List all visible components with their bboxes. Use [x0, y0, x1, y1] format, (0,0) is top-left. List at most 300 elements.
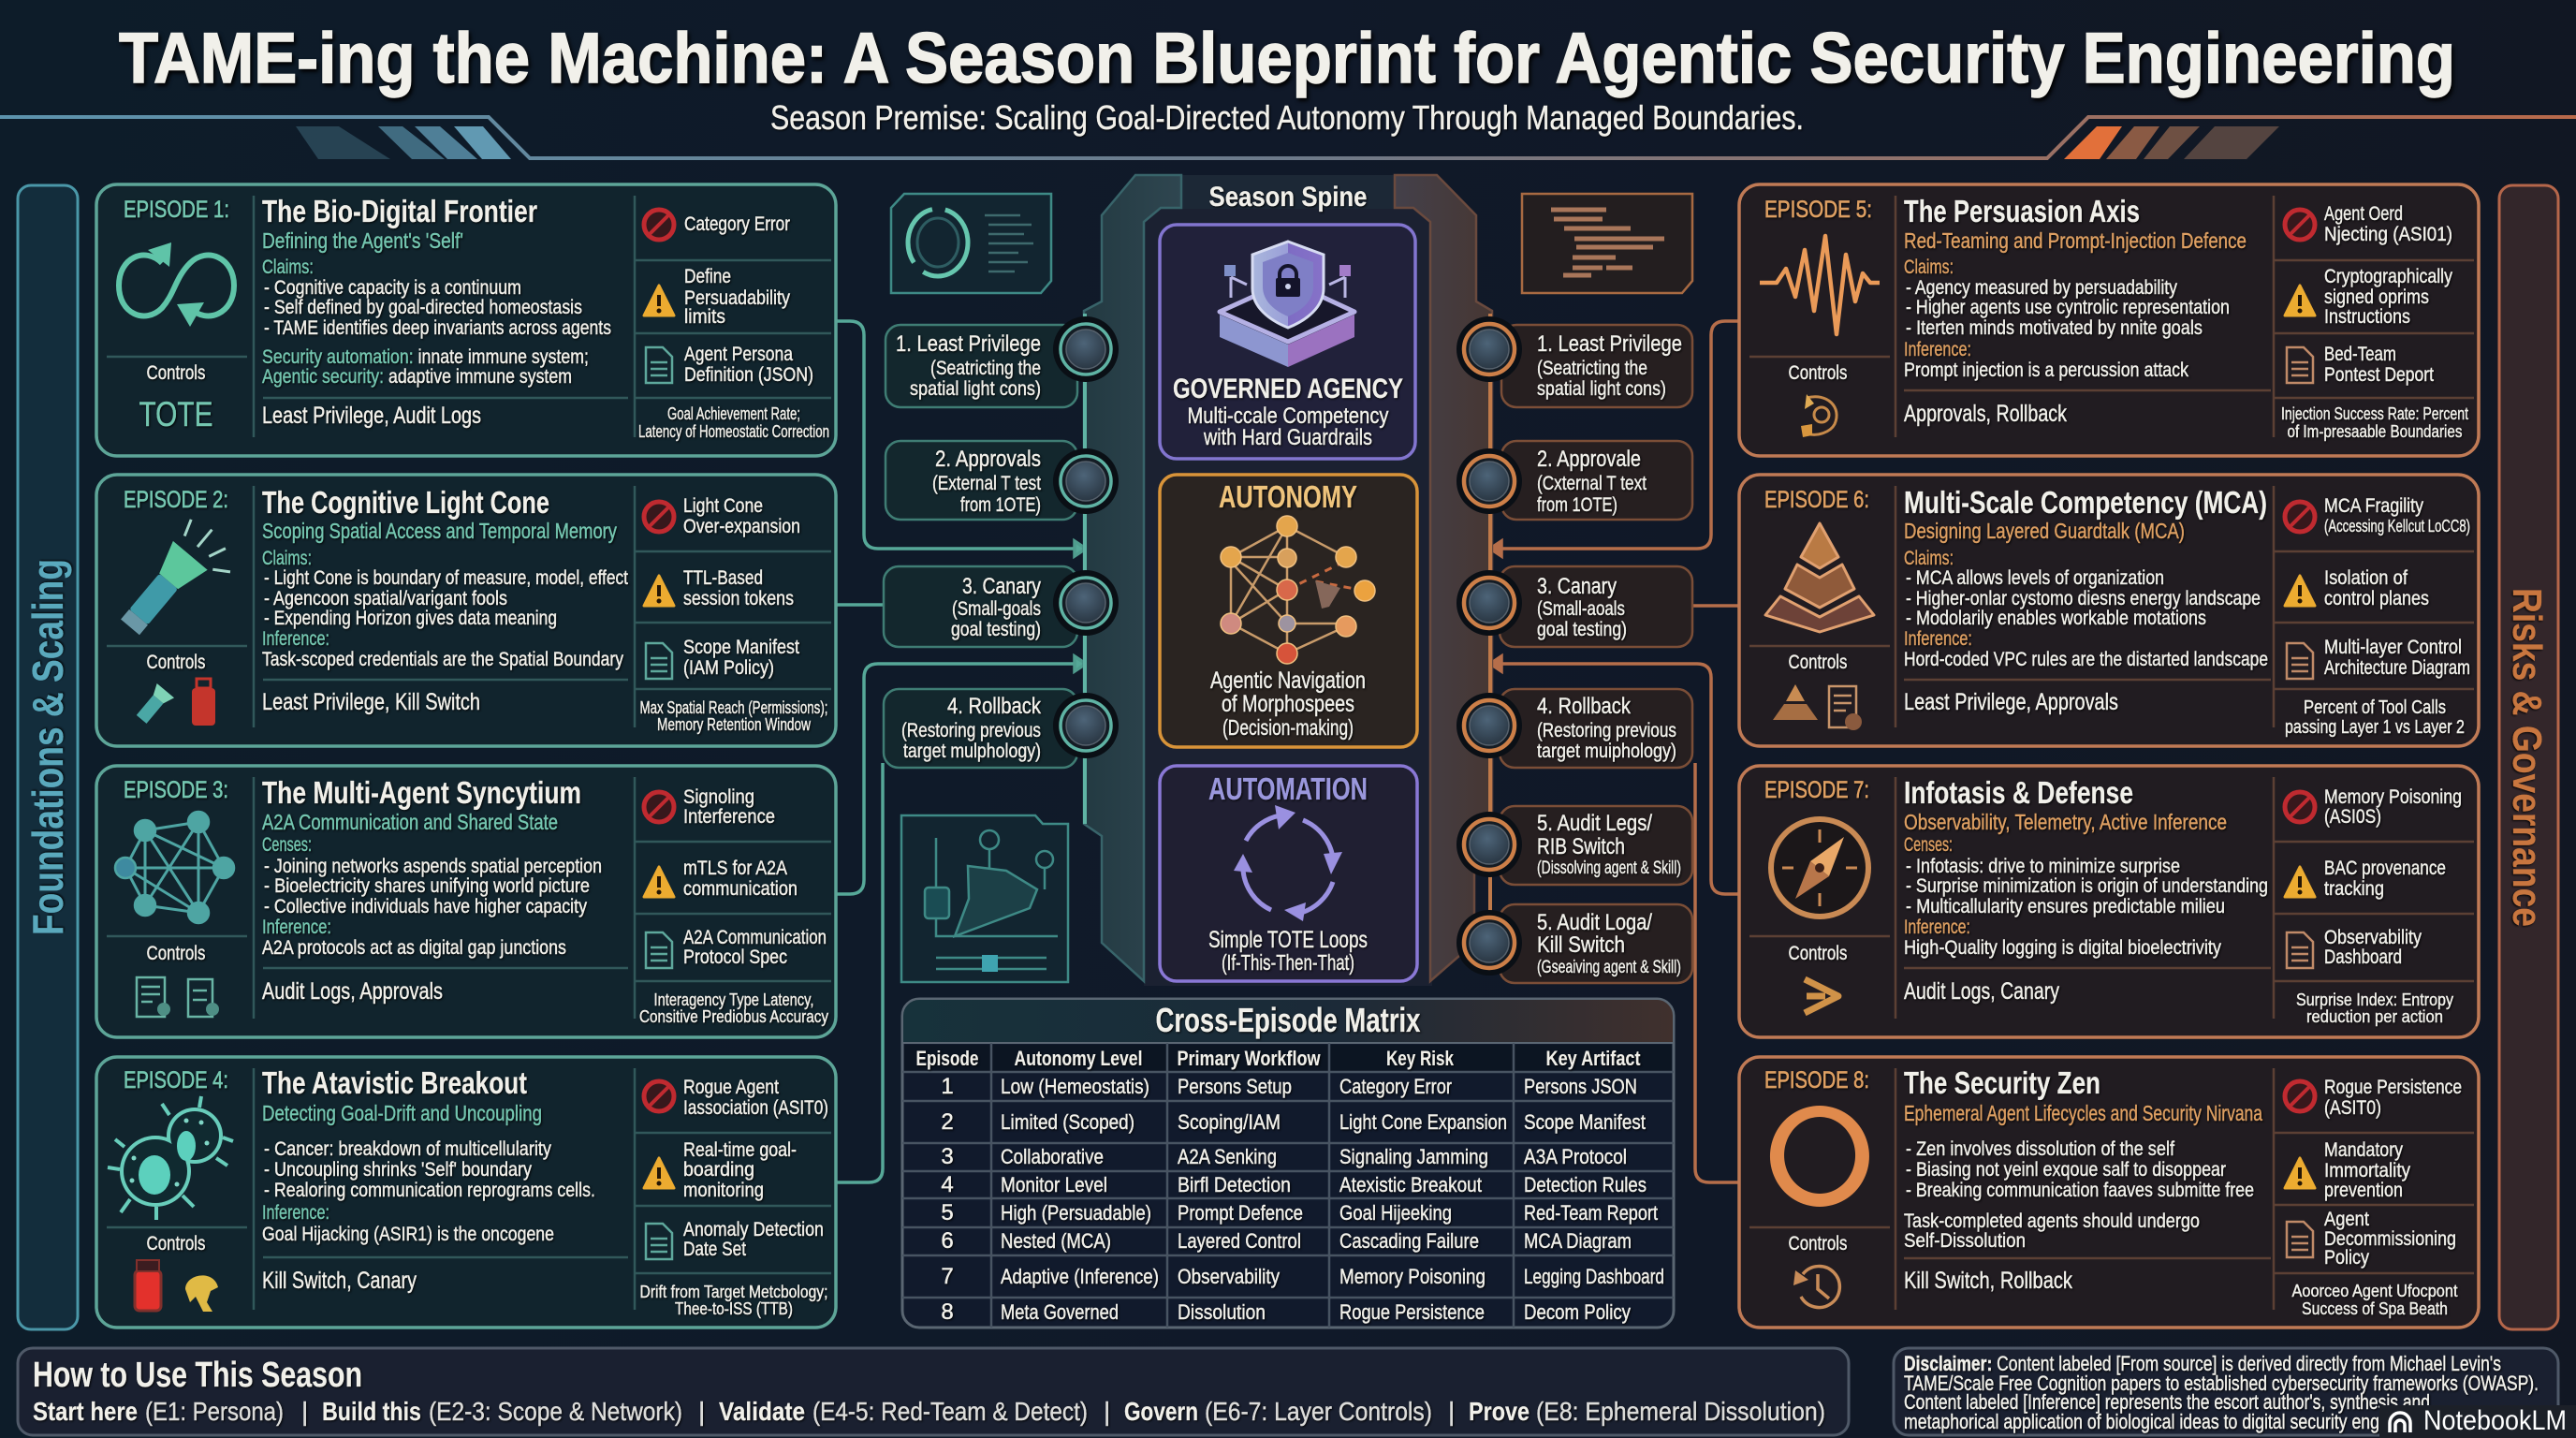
claims: - Collective individuals have higher capacity	[264, 896, 587, 917]
matrix row 8: Decom Policy	[1524, 1300, 1631, 1324]
pill: approvals	[886, 441, 1077, 520]
title: The Security Zen	[1904, 1065, 2100, 1100]
matrix row 6	[941, 1228, 1632, 1254]
risk rows: boarding	[683, 1159, 754, 1181]
title: The Atavistic Breakout	[262, 1065, 527, 1100]
icon: compass	[1771, 819, 1868, 917]
caption	[1187, 404, 1389, 450]
subtitle: Designing Layered Guardtalk (MCA)	[1904, 519, 2185, 543]
side banner: foundations and scaling	[18, 185, 78, 1329]
risk rows: Memory Poisoning	[2324, 786, 2462, 808]
matrix row 2: Scope Manifest	[1524, 1110, 1646, 1134]
risk rows: limits	[684, 306, 725, 328]
inference: Inference:	[1904, 339, 1971, 360]
risk rows: Njecting (ASI01)	[2324, 224, 2452, 245]
risk rows: Bed-Team	[2324, 344, 2396, 365]
caption: Multi-ccale Competency	[1187, 404, 1389, 429]
subtitle: Defining the Agent's 'Self'	[262, 228, 463, 253]
controls: Controls	[146, 652, 206, 673]
claims: - TAME identifies deep invariants across agents	[264, 317, 611, 339]
pill: rollback	[1500, 689, 1692, 768]
risk rows: Multi-layer Control	[2324, 637, 2462, 658]
claims: Claims:	[262, 548, 312, 569]
card: governed agency	[1160, 225, 1415, 459]
risk rows: Instructions	[2324, 306, 2410, 328]
subtitle: A2A Communication and Shared State	[262, 810, 558, 834]
matrix row 8: Rogue Persistence	[1339, 1300, 1485, 1324]
matrix row 3	[941, 1144, 1627, 1169]
matrix row 8: Dissolution	[1178, 1300, 1266, 1324]
pill: rollback: 4. Rollback	[1537, 694, 1632, 719]
controls: Controls	[146, 943, 206, 964]
pill: canary: 3. Canary	[1537, 574, 1617, 599]
pill: least privilege	[886, 325, 1077, 407]
claims: - Self defined by goal-directed homeostasis	[264, 297, 582, 318]
matrix row 7: Adaptive (Inference)	[1001, 1265, 1159, 1288]
title: The Bio-Digital Frontier	[262, 194, 537, 228]
inference: Agentic security: adaptive immune system	[262, 366, 572, 388]
risk rows: Interference	[683, 806, 775, 828]
matrix row 3: A2A Senking	[1178, 1145, 1277, 1168]
claims	[264, 1138, 595, 1201]
panel: episode 2	[96, 475, 836, 746]
controls list: Least Privilege, Kill Switch	[262, 689, 480, 715]
risk rows: Scope Manifest	[683, 637, 799, 658]
risk rows	[640, 495, 827, 734]
matrix row 3: Collaborative	[1001, 1145, 1104, 1168]
risk rows: (Accessing Kellcut LoCC8)	[2324, 517, 2470, 536]
matrix row 3: 3	[941, 1144, 954, 1169]
inference: Prompt injection is a percussion attack	[1904, 360, 2188, 381]
risk rows: Max Spatial Reach (Permissions);	[640, 698, 827, 717]
claims	[262, 834, 602, 917]
central spine frame	[1084, 175, 1432, 986]
claims: - Multicallularity ensures predictable milieu	[1906, 896, 2225, 917]
risk rows: tracking	[2324, 878, 2384, 900]
risk rows: Memory Retention Window	[657, 715, 812, 734]
label: AUTONOMY	[1219, 479, 1357, 514]
controls	[137, 943, 219, 1017]
claims: Censes:	[1904, 834, 1953, 856]
risk rows: Percent of Tool Calls	[2304, 697, 2446, 718]
pill: audit logs, rib switch: (Dissolving agent & Skill)	[1537, 858, 1681, 878]
rail wires	[1085, 314, 1490, 943]
dials: left rail	[1053, 316, 1119, 758]
risk rows: session tokens	[683, 588, 794, 609]
risk rows	[2281, 203, 2468, 441]
controls list: Least Privilege, Audit Logs	[262, 403, 481, 429]
steps: |	[1448, 1397, 1455, 1426]
risk rows	[2285, 495, 2470, 738]
controls list: Kill Switch, Canary	[262, 1268, 417, 1294]
title: The Persuasion Axis	[1904, 194, 2140, 228]
risk rows: (ASIT0)	[2324, 1097, 2381, 1119]
risk rows: Rogue Agent	[683, 1077, 779, 1098]
inference: Hord-coded VPC rules are the distarted landscape	[1904, 649, 2268, 670]
matrix row 6: Cascading Failure	[1339, 1229, 1479, 1253]
matrix row 4	[941, 1172, 1647, 1197]
matrix row 4: Monitor Level	[1001, 1173, 1107, 1196]
controls	[1788, 943, 1848, 1013]
claims	[262, 257, 611, 339]
controls list: Kill Switch, Rollback	[1904, 1268, 2072, 1294]
pill: audit logs, kill switch: 5. Audit Loga/	[1537, 910, 1652, 935]
inference	[262, 346, 589, 388]
claims: - Agencoon spatial/varigant fools	[264, 588, 507, 609]
inference: Task-scoped credentials are the Spatial Boundary	[262, 649, 623, 670]
pill: rollback: (Restoring previous	[901, 720, 1041, 741]
steps: (E2-3: Scope & Network)	[429, 1397, 682, 1426]
inference	[1904, 1211, 2200, 1252]
inference	[262, 917, 566, 959]
left rail	[1084, 175, 1181, 981]
risk rows: Persuadability	[684, 287, 790, 309]
claims: - Bioelectricity shares unifying world picture	[264, 875, 590, 897]
caption	[1208, 927, 1368, 975]
pill: canary	[884, 566, 1077, 647]
dials: right rail	[1456, 316, 1522, 976]
controls	[135, 1233, 218, 1312]
thumbnail: circular scan	[891, 194, 1051, 293]
card: automation	[1160, 766, 1417, 981]
controls: Controls	[1788, 652, 1848, 673]
inference	[1904, 917, 2221, 959]
matrix row 1: Low (Hemeostatis)	[1001, 1075, 1149, 1098]
claims	[1906, 1138, 2254, 1201]
matrix header row	[915, 1047, 1641, 1070]
risk rows: Over-expansion	[683, 516, 800, 537]
matrix title: Cross-Episode Matrix	[1155, 1001, 1421, 1039]
risk rows: Iassociation (ASIT0)	[683, 1097, 828, 1119]
inference: Self-Dissolution	[1904, 1230, 2026, 1252]
subtitle: Detecting Goal-Drift and Uncoupling	[262, 1101, 542, 1125]
matrix row 1: Persons JSON	[1524, 1075, 1637, 1098]
icon: flashlight	[113, 515, 243, 653]
matrix row 7: Observability	[1178, 1265, 1280, 1288]
matrix header row: Primary Workflow	[1178, 1047, 1321, 1070]
risk rows	[640, 1077, 828, 1318]
subtitle: season premise: Season Premise: Scaling Goal-Directed Autonomy Through Managed Boundaries.	[770, 98, 1804, 137]
pill: approvals	[1501, 441, 1692, 520]
risk rows: Cryptographically	[2324, 266, 2452, 287]
pill: approvals: 2. Approvals	[935, 447, 1041, 472]
claims: Claims:	[1904, 548, 1954, 569]
matrix row 5: Goal Hijeeking	[1339, 1201, 1452, 1225]
episode label: EPISODE 4:	[124, 1067, 228, 1093]
risk rows: of Im-presaable Boundaries	[2288, 422, 2462, 441]
risk rows: Rogue Persistence	[2324, 1077, 2462, 1098]
matrix row 5: Prompt Defence	[1178, 1201, 1303, 1225]
steps: Govern	[1124, 1397, 1198, 1426]
risk rows: Success of Spa Beath	[2302, 1299, 2448, 1318]
caption: Simple TOTE Loops	[1208, 927, 1368, 953]
claims: - Breaking communication faaves submitte free	[1906, 1180, 2254, 1201]
matrix row 2: 2	[941, 1109, 954, 1135]
claims: - Expending Horizon gives data meaning	[264, 608, 557, 629]
steps: Build this	[322, 1397, 421, 1426]
icon: network	[115, 812, 234, 923]
risk rows: Consitive Prediobus Accuracy	[639, 1007, 828, 1026]
claims: - Iterten minds motivated by nnite goals	[1906, 317, 2203, 339]
claims	[1904, 257, 2230, 339]
side banner: risks and governance: Risks & Governance	[2504, 588, 2550, 927]
risk rows	[2285, 786, 2462, 1026]
claims: - Cancer: breakdown of multicellularity	[264, 1138, 551, 1160]
matrix row 6: MCA Diagram	[1524, 1229, 1632, 1253]
pill: approvals: from 1OTE)	[1537, 494, 1617, 516]
risk rows: Surprise Index: Entropy	[2296, 990, 2453, 1009]
steps: (E8: Ephemeral Dissolution)	[1536, 1397, 1825, 1426]
card: autonomy	[1160, 475, 1417, 747]
risk rows: (IAM Policy)	[683, 657, 774, 679]
matrix row 2: Light Cone Expansion	[1339, 1110, 1507, 1134]
pill: canary: goal testing)	[1537, 619, 1627, 640]
title: The Cognitive Light Cone	[262, 485, 549, 520]
inference: Security automation: innate immune system;	[262, 346, 589, 368]
inference	[262, 1202, 554, 1245]
episode label: EPISODE 7:	[1764, 777, 1869, 803]
pill: canary: (Small-aoals	[1537, 598, 1625, 620]
risk rows: Decommissioning	[2324, 1228, 2456, 1250]
pill: rollback: target muiphology)	[1537, 741, 1676, 762]
heading: How to Use This Season	[33, 1356, 362, 1395]
title: The Multi-Agent Syncytium	[262, 775, 581, 810]
risk rows: Agent Persona	[684, 344, 793, 365]
matrix row 5: Red-Team Report	[1524, 1201, 1658, 1225]
risk rows: reduction per action	[2306, 1007, 2443, 1026]
claims: - Modolarily enables workable motations	[1906, 608, 2206, 629]
risk rows: Latency of Homeostatic Correction	[638, 422, 829, 441]
matrix row 3: A3A Protocol	[1524, 1145, 1627, 1168]
episode label: EPISODE 5:	[1764, 197, 1872, 223]
risk rows: signed oprims	[2324, 286, 2429, 308]
inference	[1904, 339, 2188, 381]
risk rows: (ASI0S)	[2324, 806, 2381, 828]
risk rows: Real-time goal-	[683, 1139, 797, 1161]
matrix row 4: Atexistic Breakout	[1339, 1173, 1482, 1196]
thumbnail: morphology blueprint	[901, 815, 1068, 982]
matrix row 5: 5	[941, 1200, 954, 1225]
risk rows: Observability	[2324, 927, 2422, 948]
controls: TOTE	[139, 395, 213, 433]
panel: episode 4	[96, 1057, 836, 1328]
claims	[1904, 548, 2261, 629]
matrix row 6: 6	[941, 1228, 954, 1254]
risk rows: control planes	[2324, 588, 2429, 609]
matrix row 7: Legging Dashboard	[1524, 1265, 1664, 1288]
risk rows: Light Cone	[683, 495, 763, 517]
header rule with stripes	[0, 117, 2576, 159]
matrix row 3: Signaling Jamming	[1339, 1145, 1488, 1168]
controls	[133, 652, 215, 726]
matrix row 7: Memory Poisoning	[1339, 1265, 1486, 1288]
subtitle: Observability, Telemetry, Active Inference	[1904, 810, 2227, 834]
connector wires: left	[836, 321, 1086, 1182]
risk rows: Anomaly Detection	[683, 1219, 824, 1240]
controls	[1788, 1233, 1848, 1308]
pill: canary: 3. Canary	[962, 574, 1041, 599]
controls: Controls	[146, 362, 206, 384]
inference: Inference:	[262, 917, 331, 938]
risk rows: Dashboard	[2324, 946, 2402, 968]
caption: of Morphospees	[1222, 691, 1354, 717]
pill: least privilege: (Seatricting the	[1537, 358, 1647, 379]
inference: Inference:	[262, 1202, 329, 1224]
controls: Controls	[1788, 1233, 1848, 1255]
risk rows: Isolation of	[2324, 567, 2408, 589]
controls	[1788, 362, 1848, 437]
claims: - Uncoupling shrinks 'Self' boundary	[264, 1159, 532, 1181]
episode label: EPISODE 2:	[124, 487, 228, 513]
matrix row 1	[941, 1074, 1637, 1099]
icon: shield with lock on platform	[1220, 242, 1354, 367]
matrix header row: Key Artifact	[1546, 1047, 1641, 1070]
icon: TOTE cycle	[1234, 805, 1342, 921]
risk rows: Define	[684, 266, 731, 287]
inference: Inference:	[262, 628, 329, 650]
panel: episode 1	[96, 184, 836, 456]
matrix header row: Key Risk	[1386, 1047, 1455, 1070]
pill: rollback: 4. Rollback	[947, 694, 1042, 719]
controls: left pills	[884, 325, 1077, 768]
controls: Controls	[1788, 362, 1848, 384]
subtitle: Scoping Spatial Access and Temporal Memory	[262, 519, 617, 543]
steps	[33, 1397, 1825, 1426]
panel: episode 6	[1739, 475, 2479, 746]
panel: disclaimer	[1894, 1348, 2558, 1435]
claims: - Higher-onlar cystomo diesns energy landscape	[1906, 588, 2261, 609]
matrix row 5	[941, 1200, 1658, 1225]
claims: - Higher agents use cyntrolic representation	[1906, 297, 2230, 318]
risk rows	[639, 786, 828, 1026]
pill: approvals: from 1OTE)	[960, 494, 1041, 516]
title: Infotasis & Defense	[1904, 775, 2133, 810]
steps: (E1: Persona)	[145, 1397, 284, 1426]
controls list: Approvals, Rollback	[1904, 401, 2067, 427]
pill: audit logs, rib switch: RIB Switch	[1537, 834, 1625, 859]
risk rows	[638, 210, 829, 441]
panel: episode 8	[1739, 1057, 2479, 1328]
episode label: EPISODE 6:	[1764, 487, 1869, 513]
pill: least privilege: (Seatricting the	[930, 358, 1041, 379]
risk rows: Protocol Spec	[683, 946, 787, 968]
caption	[1210, 668, 1366, 740]
panel: disclaimer: metaphorical application of biological ideas to digital security eng	[1904, 1410, 2379, 1433]
claims: - MCA allows levels of organization	[1906, 567, 2164, 589]
claims: Claims:	[262, 257, 314, 278]
episode label: EPISODE 3:	[124, 777, 228, 803]
matrix row 7	[941, 1264, 1664, 1289]
risk rows: Agent Oerd	[2324, 203, 2403, 225]
matrix header row: Autonomy Level	[1015, 1047, 1142, 1070]
steps: Validate	[719, 1397, 805, 1426]
matrix row 4: Detection Rules	[1524, 1173, 1647, 1196]
matrix row 8: 8	[941, 1299, 954, 1325]
risk rows: Goal Achievement Rate;	[667, 404, 800, 423]
matrix row 1: Persons Setup	[1178, 1075, 1292, 1098]
panel: episode 7	[1739, 766, 2479, 1037]
claims: - Realoring communication reprograms cells.	[264, 1180, 595, 1201]
claims: - Joining networks aspends spatial perception	[264, 856, 602, 877]
steps: (E4-5: Red-Team & Detect)	[812, 1397, 1088, 1426]
risk rows: BAC provenance	[2324, 858, 2446, 879]
pill: audit logs, rib switch	[1500, 806, 1692, 885]
inference: Inference:	[1904, 628, 1972, 650]
controls: Controls	[1788, 943, 1848, 964]
panel: how to use this season	[18, 1348, 1849, 1435]
connector wires: right	[1490, 321, 1739, 1182]
inference: Inference:	[1904, 917, 1970, 938]
icon: dividing cell	[108, 1096, 233, 1220]
risk rows: passing Layer 1 vs Layer 2	[2285, 717, 2465, 738]
caption: (If-This-Then-That)	[1222, 950, 1354, 975]
panel: episode 5	[1739, 184, 2479, 456]
matrix row 2: Limited (Scoped)	[1001, 1110, 1134, 1134]
side banner: foundations and scaling: Foundations & Scaling	[23, 559, 72, 935]
steps: |	[1104, 1397, 1110, 1426]
side banner: risks and governance	[2499, 185, 2558, 1329]
inference: High-Quality logging is digital bioelectrivity	[1904, 937, 2221, 959]
risk rows: communication	[683, 878, 798, 900]
pill: approvals: (External T test	[932, 473, 1041, 494]
cross-episode matrix	[902, 999, 1674, 1328]
risk rows: Category Error	[684, 213, 790, 235]
pill: audit logs, kill switch	[1500, 904, 1692, 983]
claims: Censes:	[262, 834, 312, 856]
pill: audit logs, rib switch: 5. Audit Legs/	[1537, 811, 1652, 836]
controls: Controls	[146, 1233, 206, 1255]
icon: pulse waveform	[1760, 236, 1880, 334]
risk rows: prevention	[2324, 1180, 2403, 1201]
subtitle: Red-Teaming and Prompt-Injection Defence	[1904, 228, 2247, 253]
episode label: EPISODE 1:	[124, 197, 229, 223]
spine heading: Season Spine	[1209, 182, 1367, 213]
risk rows: Policy	[2324, 1247, 2369, 1269]
matrix row 5: High (Persuadable)	[1001, 1201, 1151, 1225]
inference: A2A protocols act as digital gap junctions	[262, 937, 566, 959]
matrix row 8: Meta Governed	[1001, 1300, 1119, 1324]
risk rows: Aoorceo Agent Ufocpont	[2291, 1282, 2458, 1300]
controls list: Least Privilege, Approvals	[1904, 689, 2118, 715]
controls: right pills	[1500, 325, 1692, 983]
steps: Start here	[33, 1397, 138, 1426]
risk rows: Agent	[2324, 1209, 2369, 1230]
pill: canary: (Small-goals	[952, 598, 1041, 620]
risk rows: Definition (JSON)	[684, 364, 813, 386]
icon: state network	[1221, 516, 1375, 664]
claims: - Agency measured by persuadability	[1906, 277, 2177, 299]
steps: |	[698, 1397, 705, 1426]
matrix row 6: Nested (MCA)	[1001, 1229, 1111, 1253]
steps: |	[301, 1397, 308, 1426]
inference	[262, 628, 623, 670]
pill: least privilege	[1501, 325, 1692, 407]
risk rows: Immortality	[2324, 1160, 2410, 1181]
matrix header row: Episode	[915, 1047, 979, 1070]
icon: pyramid	[1765, 523, 1874, 632]
icon: enso ring	[1770, 1106, 1869, 1207]
risk rows: Signoling	[683, 786, 754, 808]
controls list: Audit Logs, Approvals	[262, 978, 443, 1005]
pill: canary	[1500, 566, 1692, 647]
risk rows: Pontest Deport	[2324, 364, 2434, 386]
title: Multi-Scale Competency (MCA)	[1904, 485, 2267, 520]
pill: rollback	[884, 689, 1077, 768]
risk rows: A2A Communication	[683, 927, 827, 948]
caption: (Decision-making)	[1222, 715, 1354, 740]
claims	[1904, 834, 2268, 917]
claims: - Surprise minimization is origin of understanding	[1906, 875, 2268, 897]
